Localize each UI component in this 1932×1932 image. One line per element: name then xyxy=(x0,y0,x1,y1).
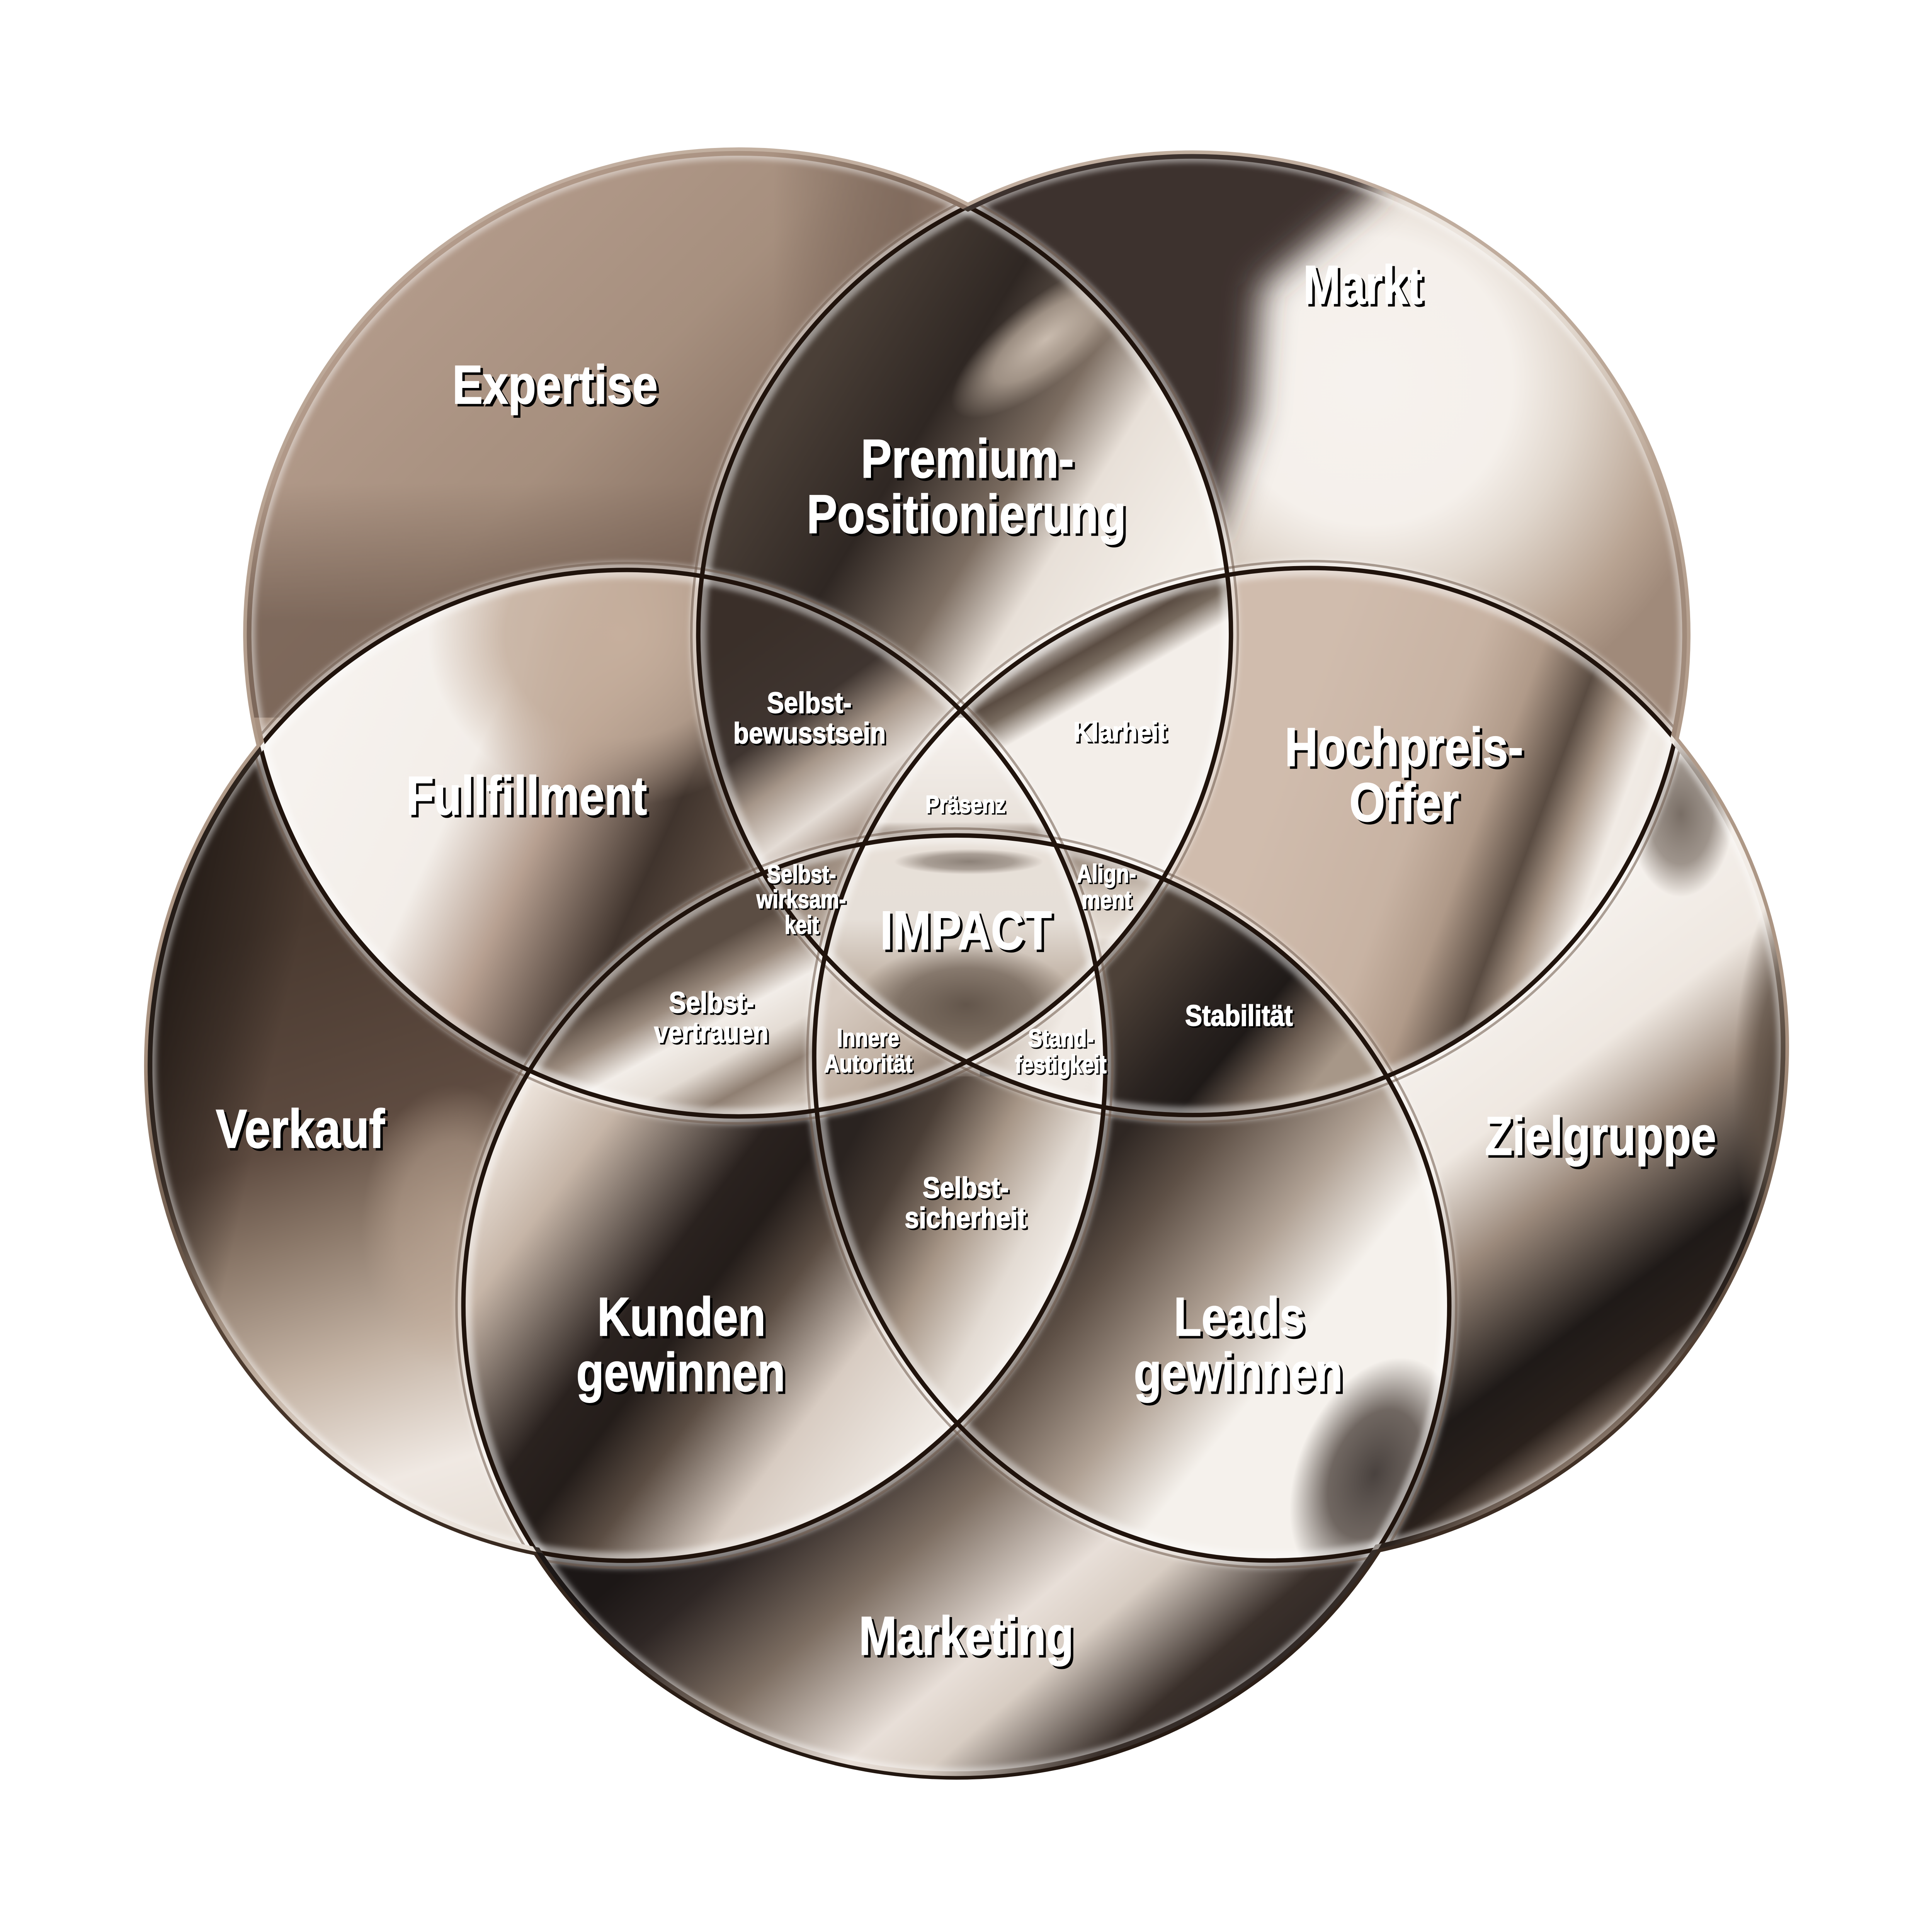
label: Alignment: ment xyxy=(1082,886,1132,914)
label: Stabilität: Stabilität xyxy=(1185,999,1293,1032)
panel: Expertise circle xyxy=(247,151,968,746)
label: Alignment: Align- xyxy=(1077,860,1136,888)
label: Premium-Positionierung: Premium- xyxy=(861,428,1074,489)
embossed arc lines xyxy=(141,144,1793,1783)
label: Innere Autorität: Autorität xyxy=(824,1049,913,1078)
label: Expertise: Expertise xyxy=(455,357,660,418)
label: Kunden gewinnen xyxy=(576,1286,788,1405)
label: Marketing: Marketing xyxy=(859,1605,1074,1666)
label: Kunden gewinnen: gewinnen xyxy=(579,1344,788,1405)
label: Leads gewinnen: Leads xyxy=(1174,1286,1304,1347)
label: Selbstsicherheit xyxy=(905,1172,1028,1236)
label: Selbstbewusstsein: bewusstsein xyxy=(733,717,886,750)
label: Standfestigkeit: festigkeit xyxy=(1016,1052,1108,1080)
panel: Verkauf circle xyxy=(138,552,1132,1573)
label: Premium-Positionierung xyxy=(807,428,1129,547)
label: Selbstwirksamkeit: Selbst- xyxy=(767,860,836,888)
label: Selbstvertrauen: Selbst- xyxy=(669,986,754,1019)
label: Innere Autorität: Autorität xyxy=(825,1051,914,1079)
label: Selbstwirksamkeit: keit xyxy=(786,912,820,940)
label: Hochpreis-Offer: Hochpreis- xyxy=(1285,716,1523,777)
label: Expertise: Expertise xyxy=(452,354,658,415)
label: Klarheit: Klarheit xyxy=(1075,718,1168,749)
panel: Innere Autorität xyxy=(809,961,974,1126)
label: Leads gewinnen xyxy=(1134,1286,1345,1405)
label: Selbstvertrauen xyxy=(654,986,770,1051)
label: Standfestigkeit: Stand- xyxy=(1029,1026,1095,1054)
panel: Standfestigkeit xyxy=(952,952,1118,1118)
label: Premium-Positionierung: Positionierung xyxy=(809,486,1129,547)
panel: Marketing circle xyxy=(442,828,1463,1794)
label: Kunden gewinnen: gewinnen xyxy=(576,1342,785,1403)
panel: Selbstvertrauen xyxy=(524,855,855,1132)
panel: Hochpreis-Offer xyxy=(1104,552,1711,1104)
label: Selbstbewusstsein: bewusstsein xyxy=(735,719,887,752)
label: Selbstsicherheit: sicherheit xyxy=(905,1202,1026,1235)
panel: Kunden gewinnen xyxy=(456,1049,980,1573)
panel: Selbstwirksamkeit xyxy=(745,836,878,974)
label: Selbstbewusstsein: Selbst- xyxy=(767,687,852,719)
label: Alignment: ment xyxy=(1083,887,1133,915)
label: Selbstvertrauen: Selbst- xyxy=(671,988,756,1021)
label: Innere Autorität: Innere xyxy=(837,1024,899,1052)
label: Leads gewinnen: gewinnen xyxy=(1136,1344,1345,1405)
panel: Alignment xyxy=(1049,828,1173,966)
label: Leads gewinnen: Leads xyxy=(1176,1289,1307,1350)
label: Selbstsicherheit: sicherheit xyxy=(906,1203,1028,1236)
label: Kunden gewinnen: Kunden xyxy=(597,1286,765,1347)
label: Selbstwirksamkeit: wirksam- xyxy=(758,887,847,915)
label: Selbstbewusstsein xyxy=(733,687,887,752)
label: Präsenz: Präsenz xyxy=(925,791,1005,818)
label: Innere Autorität: Innere xyxy=(838,1025,901,1053)
label: Hochpreis-Offer: Offer xyxy=(1349,772,1459,833)
label: Premium-Positionierung: Premium- xyxy=(863,430,1077,492)
label: Stabilität: Stabilität xyxy=(1187,1001,1294,1034)
label: Selbstsicherheit: Selbst- xyxy=(923,1172,1009,1204)
label: Selbstsicherheit: Selbst- xyxy=(924,1173,1010,1206)
label: Selbstwirksamkeit: Selbst- xyxy=(769,862,837,890)
panel: Präsenz xyxy=(855,718,1077,855)
label: Fullfillment: Fullfillment xyxy=(406,765,647,826)
panel: Premium-Positionierung xyxy=(690,193,1242,745)
label: Standfestigkeit: Stand- xyxy=(1028,1024,1094,1052)
label: Hochpreis-Offer xyxy=(1285,716,1526,835)
label: Alignment xyxy=(1077,860,1138,915)
label: Präsenz: Präsenz xyxy=(927,792,1007,820)
outer rim of the diagram xyxy=(148,151,1786,1776)
label: IMPACT: IMPACT xyxy=(883,902,1054,963)
panel: Selbstsicherheit xyxy=(800,1077,1104,1435)
label: Premium-Positionierung: Positionierung xyxy=(807,483,1126,544)
label: Verkauf: Verkauf xyxy=(218,1100,388,1162)
label: Zielgruppe: Zielgruppe xyxy=(1485,1105,1716,1167)
label: Selbstbewusstsein: Selbst- xyxy=(769,688,853,721)
label: Klarheit: Klarheit xyxy=(1073,717,1167,748)
label: Standfestigkeit xyxy=(1015,1024,1108,1080)
label: Hochpreis-Offer: Offer xyxy=(1352,774,1461,835)
panel: Stabilität xyxy=(1077,855,1408,1132)
label: Zielgruppe: Zielgruppe xyxy=(1487,1108,1719,1169)
label: Marketing: Marketing xyxy=(861,1608,1076,1669)
label: Markt: Markt xyxy=(1306,257,1425,318)
label: Fullfillment: Fullfillment xyxy=(409,767,650,828)
label: Innere Autorität xyxy=(824,1024,914,1079)
label: Markt: Markt xyxy=(1303,254,1422,315)
label: Selbstwirksamkeit xyxy=(756,860,847,940)
panel: Selbstbewusstsein xyxy=(690,552,993,911)
label: Hochpreis-Offer: Hochpreis- xyxy=(1287,719,1526,780)
panel: Klarheit xyxy=(939,552,1242,911)
label: Selbstwirksamkeit: wirksam- xyxy=(756,885,846,913)
label: Selbstwirksamkeit: keit xyxy=(785,911,819,939)
label: Standfestigkeit: festigkeit xyxy=(1015,1050,1107,1078)
label: Leads gewinnen: gewinnen xyxy=(1134,1342,1343,1403)
panel: Fullfillment xyxy=(248,464,814,1104)
label: Alignment: Align- xyxy=(1078,861,1138,889)
panel: Markt circle xyxy=(963,154,1687,740)
panel: Zielgruppe circle xyxy=(800,552,1849,1573)
label: Verkauf: Verkauf xyxy=(216,1098,385,1159)
panel: IMPACT centre xyxy=(814,828,1104,1077)
label: IMPACT: IMPACT xyxy=(880,900,1052,961)
label: Selbstvertrauen: vertrauen xyxy=(654,1016,769,1049)
label: Selbstvertrauen: vertrauen xyxy=(656,1018,770,1051)
panel: Leads gewinnen xyxy=(939,1049,1492,1616)
label: Kunden gewinnen: Kunden xyxy=(600,1289,768,1350)
